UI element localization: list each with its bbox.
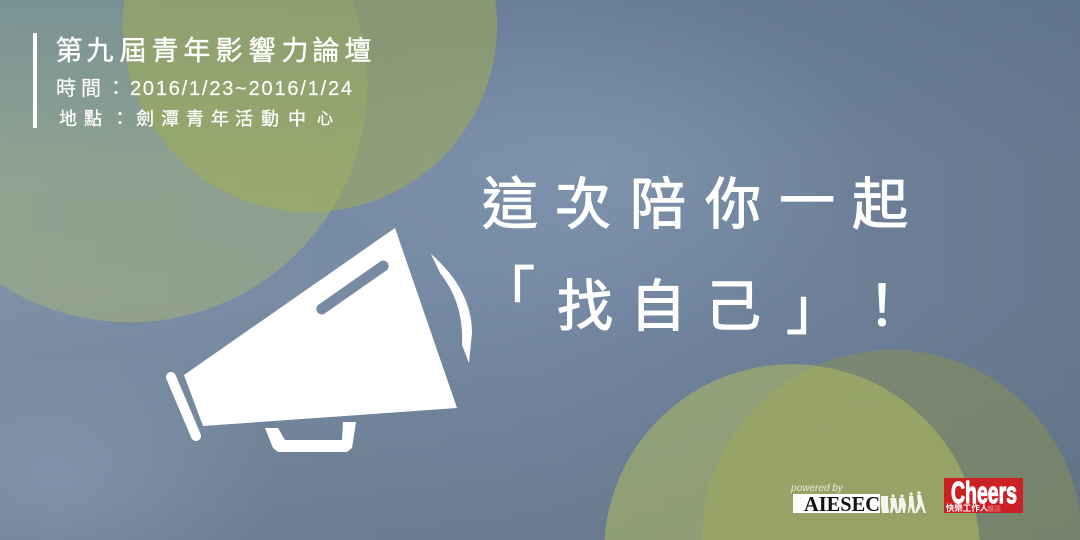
logo: Cheers: 雜誌 (987, 504, 1001, 513)
event location: 中 (288, 109, 306, 129)
logo: Cheers (944, 475, 1023, 513)
event location: 劍 (136, 109, 154, 129)
event time: 時 (56, 77, 76, 100)
event location: 潭 (161, 109, 179, 129)
walking figures (881, 491, 926, 513)
decorative circles: bottom right (604, 350, 1080, 540)
subtitle: 快樂工作人 (946, 503, 989, 513)
icon: megaphone (171, 228, 472, 452)
powered by label: powered by (790, 483, 844, 494)
event time: 2016/1/23~2016/1/24 (130, 78, 352, 100)
headline line 1: 這 (482, 173, 538, 236)
event location (59, 109, 333, 129)
headline line 1: 起 (852, 173, 908, 236)
headline line 2: 己 (705, 275, 761, 338)
event title: 壇 (344, 36, 372, 66)
event location: 心 (317, 110, 333, 128)
decorative circles: top left (0, 0, 497, 322)
event title: 論 (312, 36, 340, 66)
headline line 2: 自 (630, 275, 686, 338)
headline line 1 (482, 170, 908, 236)
logo: AIESEC: AIESEC (804, 492, 880, 516)
event title: 九 (86, 36, 114, 66)
headline line 2: 」 (786, 278, 842, 341)
headline line 1: 陪 (630, 173, 686, 236)
headline line 1: 你 (705, 173, 761, 236)
event location: 年 (211, 109, 229, 129)
event title: 青 (152, 36, 178, 66)
event location: 活 (235, 109, 253, 129)
megaphone cone (184, 228, 457, 426)
headline line 2: ！ (854, 275, 910, 338)
headline line 1: 次 (555, 173, 611, 236)
event title: 影 (216, 36, 242, 66)
headline (479, 170, 910, 341)
Cheers wordmark: Cheers (951, 475, 1017, 510)
headline line 2 (479, 262, 910, 341)
red badge (944, 478, 1023, 513)
logo: AIESEC (790, 483, 926, 516)
event title: 年 (184, 36, 210, 66)
event location: 青 (186, 109, 204, 129)
headline line 2: 找 (557, 275, 613, 338)
event title: 力 (282, 36, 308, 66)
event time: 間 (81, 78, 101, 100)
event title: 響 (248, 36, 276, 66)
AIESEC wordmark (793, 494, 880, 513)
headline line 1: 一 (779, 170, 835, 233)
megaphone mouth bar (171, 377, 196, 436)
megaphone handle (265, 422, 356, 452)
event title (56, 36, 372, 66)
event location: ： (111, 109, 129, 129)
event title: 屆 (120, 36, 146, 66)
accent bar (33, 33, 37, 128)
event location: 動 (261, 109, 279, 129)
event title: 第 (56, 36, 82, 66)
sound wave (431, 254, 472, 363)
event time: ： (106, 78, 126, 100)
event location: 地 (59, 109, 77, 129)
event information (33, 33, 372, 129)
event location: 點 (84, 109, 102, 129)
headline line 2: 「 (479, 262, 535, 325)
